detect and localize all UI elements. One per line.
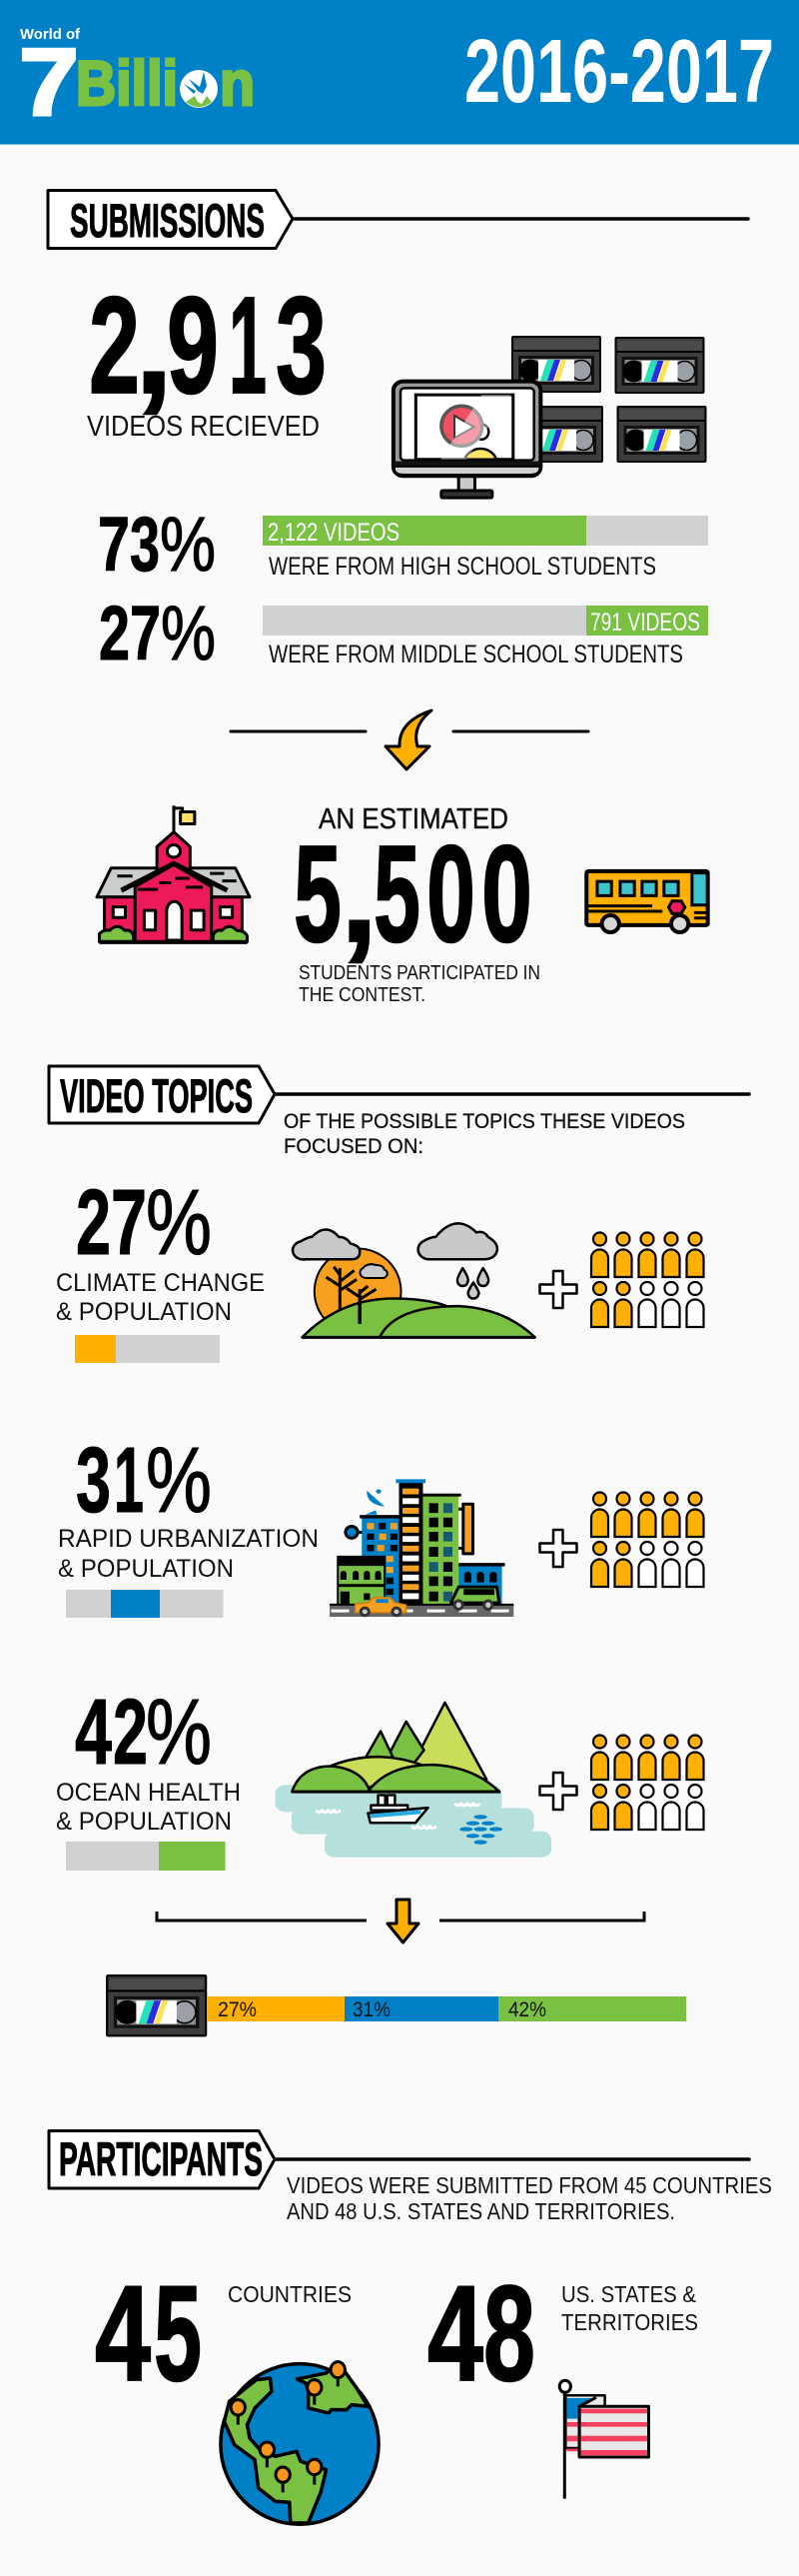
icon: monitor with video tapes bbox=[394, 337, 705, 498]
heading: submissions: SUBMISSIONS bbox=[70, 194, 265, 247]
logo: World of 7 Billion: 7 bbox=[19, 29, 79, 136]
stat row: 27% middle school: 7 bbox=[130, 591, 161, 676]
stat: 45 countries: 4 bbox=[95, 2257, 151, 2409]
icon: globe with pins bbox=[221, 2362, 379, 2524]
stat: 2,913 videos received: , bbox=[135, 269, 173, 423]
icon: plus (urbanization) bbox=[539, 1530, 577, 1567]
stat: 45 countries: 5 bbox=[154, 2257, 202, 2409]
topic: rapid urbanization 31% bbox=[58, 1428, 319, 1618]
stat row: 27% middle school: 2 bbox=[99, 591, 130, 676]
topic: ocean health 42%: 2 bbox=[113, 1680, 148, 1784]
topic: climate change 27%: 2 bbox=[76, 1170, 111, 1274]
topic: ocean health 42%: OCEAN HEALTH bbox=[56, 1779, 241, 1807]
heading: participants: PARTICIPANTS bbox=[59, 2132, 263, 2185]
stat: 2,913 videos received: VIDEOS RECIEVED bbox=[87, 411, 320, 443]
stat: 5,500 students: 5 bbox=[374, 817, 420, 971]
stat: 48 states and territories: US. STATES & bbox=[561, 2281, 696, 2307]
icon: plus (climate) bbox=[539, 1271, 577, 1308]
topic: rapid urbanization 31%: RAPID URBANIZATION bbox=[58, 1525, 319, 1553]
stat: 45 countries bbox=[95, 2257, 352, 2409]
logo: World of 7 Billion: Billi bbox=[76, 49, 178, 119]
topic: climate change 27%: CLIMATE CHANGE bbox=[56, 1269, 265, 1297]
heading: video topics: VIDEO TOPICS bbox=[60, 1069, 253, 1122]
stat row: 73% high school: WERE FROM HIGH SCHOOL STUDENTS bbox=[269, 553, 656, 581]
icon: climate landscape bbox=[293, 1223, 535, 1337]
stat row: 27% middle school bbox=[99, 591, 708, 676]
stat row: 73% high school: % bbox=[160, 502, 216, 588]
chart: topic share strip: 31% bbox=[353, 1998, 391, 2021]
bar: ocean share bbox=[66, 1842, 226, 1871]
heading: participants bbox=[49, 2130, 749, 2188]
topic: rapid urbanization 31%: % bbox=[146, 1428, 212, 1532]
stat row: 27% middle school: WERE FROM MIDDLE SCHOOL STUDENTS bbox=[269, 641, 683, 668]
icon: city bbox=[330, 1479, 513, 1617]
stat: 2,913 videos received: 9 bbox=[167, 269, 219, 423]
stat: 2,913 videos received bbox=[87, 269, 327, 443]
stat: 48 states and territories: 8 bbox=[483, 2257, 535, 2409]
topic: rapid urbanization 31%: 1 bbox=[114, 1428, 144, 1532]
heading: submissions bbox=[48, 190, 748, 248]
icon: plus (ocean) bbox=[539, 1773, 577, 1810]
bar: 791 videos bbox=[263, 606, 708, 637]
logo: World of 7 Billion: n bbox=[220, 49, 255, 119]
chart: topic share strip bbox=[207, 1996, 686, 2021]
icon: US flag bbox=[559, 2380, 648, 2499]
logo: World of 7 Billion: World of bbox=[20, 26, 81, 43]
icon: school bus bbox=[586, 871, 708, 932]
arrow: summary bracket and down arrow bbox=[157, 1900, 644, 1942]
topic: climate change 27%: & POPULATION bbox=[56, 1298, 232, 1326]
arrow: curved down with side lines bbox=[231, 710, 588, 769]
bar: climate share bbox=[75, 1335, 220, 1363]
stat: 5,500 students: 0 bbox=[426, 817, 475, 971]
topic: ocean health 42%: % bbox=[146, 1680, 212, 1784]
topic: climate change 27% bbox=[56, 1170, 265, 1363]
stat: 2,913 videos received: 1 bbox=[229, 269, 267, 423]
stat: 5,500 students: AN ESTIMATED bbox=[319, 803, 508, 835]
stat: 5,500 students: STUDENTS PARTICIPATED IN bbox=[299, 962, 540, 984]
bar: 2,122 videos bbox=[263, 516, 708, 547]
bar: 791 videos: 791 VIDEOS bbox=[590, 609, 700, 637]
stat: 5,500 students: THE CONTEST. bbox=[299, 984, 425, 1006]
stat: 48 states and territories bbox=[427, 2257, 698, 2409]
text: topics intro: FOCUSED ON: bbox=[284, 1135, 423, 1158]
icon: school bbox=[97, 805, 250, 942]
text: topics intro: OF THE POSSIBLE TOPICS THESE VIDEOS bbox=[284, 1110, 685, 1133]
icon: island and ocean bbox=[276, 1703, 551, 1858]
stat: 5,500 students: 5 bbox=[294, 817, 342, 971]
stat row: 73% high school: 3 bbox=[130, 502, 160, 588]
chart: topic share strip: 27% bbox=[218, 1998, 257, 2021]
icon: people 7 of 10 (urbanization) bbox=[591, 1493, 703, 1587]
stat: 5,500 students: , bbox=[341, 817, 378, 971]
stat: 45 countries: COUNTRIES bbox=[228, 2281, 352, 2307]
heading: video topics bbox=[49, 1066, 749, 1123]
stat row: 73% high school bbox=[98, 502, 708, 588]
topic: climate change 27%: % bbox=[146, 1170, 212, 1274]
topic: ocean health 42% bbox=[56, 1680, 241, 1871]
stat: 5,500 students bbox=[294, 803, 540, 1006]
logo: World of 7 Billion bbox=[19, 26, 255, 136]
bar: 2,122 videos: 2,122 VIDEOS bbox=[268, 519, 400, 547]
stat: 5,500 students: 0 bbox=[481, 817, 532, 971]
topic: rapid urbanization 31%: & POPULATION bbox=[58, 1555, 234, 1583]
stat: 2,913 videos received: 2 bbox=[89, 269, 140, 423]
icon: people 7 of 10 (climate) bbox=[591, 1233, 703, 1327]
header banner bbox=[0, 0, 799, 144]
stat: 2,913 videos received: 3 bbox=[276, 269, 327, 423]
icon: people 7 of 10 (ocean) bbox=[591, 1735, 703, 1830]
stat: 48 states and territories: TERRITORIES bbox=[561, 2309, 698, 2335]
chart: topic share strip: 42% bbox=[508, 1998, 546, 2021]
text: participants intro bbox=[287, 2172, 772, 2224]
icon: video tape (summary) bbox=[107, 1975, 206, 2035]
topic: climate change 27%: 7 bbox=[111, 1170, 147, 1274]
stat row: 73% high school: 7 bbox=[98, 502, 130, 588]
text: topics intro bbox=[284, 1110, 685, 1158]
stat row: 27% middle school: % bbox=[161, 591, 216, 676]
topic: ocean health 42%: & POPULATION bbox=[56, 1808, 232, 1836]
topic: ocean health 42%: 4 bbox=[75, 1680, 112, 1784]
topic: rapid urbanization 31%: 3 bbox=[76, 1428, 111, 1532]
text: participants intro: AND 48 U.S. STATES AND TERRITORIES. bbox=[287, 2198, 675, 2224]
bar: urbanization share bbox=[66, 1590, 224, 1618]
stat: 48 states and territories: 4 bbox=[427, 2257, 483, 2409]
